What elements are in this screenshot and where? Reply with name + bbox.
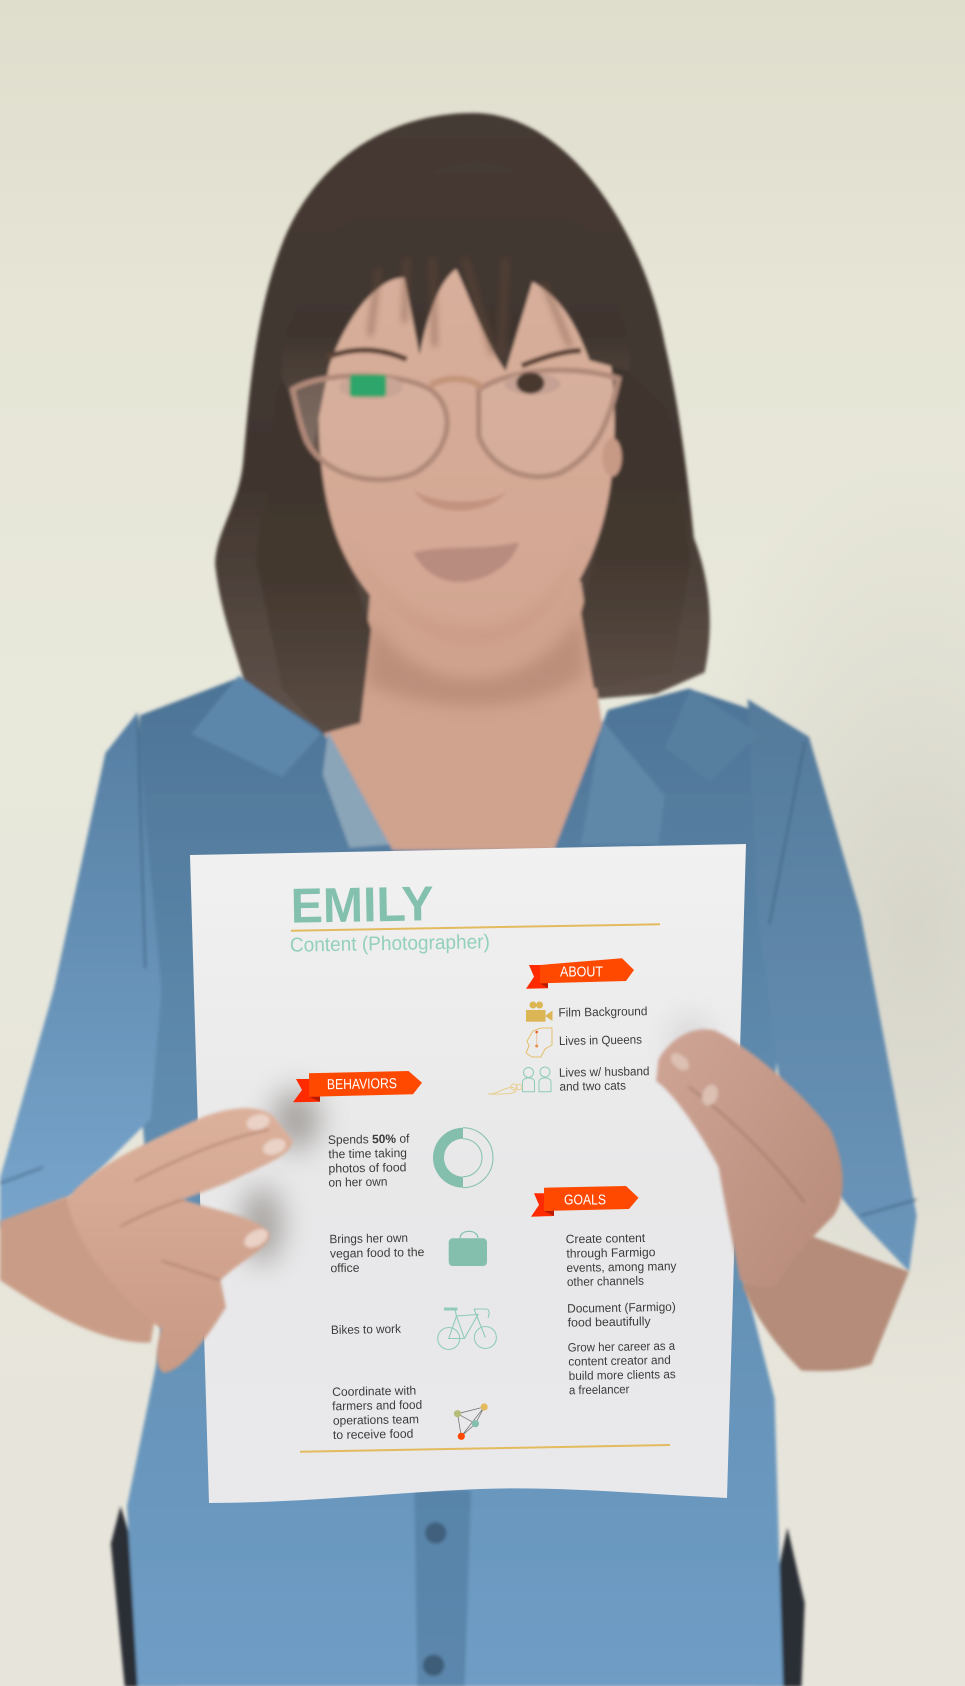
left hand [67, 1108, 293, 1373]
text: Bikes to work [331, 1322, 402, 1337]
text: on her own [328, 1175, 388, 1190]
goal 3: build more clients as [569, 1367, 676, 1383]
icon: Queens map [526, 1028, 552, 1057]
behavior: bikes [331, 1309, 496, 1350]
goal 1: events, among many [566, 1259, 677, 1275]
finger crease [689, 1087, 805, 1203]
donut chart: 50% [433, 1128, 493, 1188]
ribbon: about [526, 958, 634, 989]
trousers [111, 1506, 805, 1686]
text: to receive food [333, 1427, 414, 1442]
ribbon: goals [531, 1186, 638, 1217]
side hair locks behind jaw [256, 344, 691, 734]
text: operations team [333, 1412, 419, 1428]
nose shadow [414, 489, 508, 510]
ribbon: goals: GOALS [564, 1192, 606, 1208]
goal 3: Grow her career as a [568, 1339, 675, 1355]
hands and forearms [0, 1029, 909, 1373]
goal 3: content creator and [568, 1353, 671, 1369]
finger shadows on paper [242, 1016, 708, 1263]
icon: bicycle [438, 1309, 496, 1350]
right hand [656, 1029, 843, 1288]
goal 3 [568, 1339, 676, 1397]
collar left [191, 676, 321, 777]
left forearm [0, 1196, 161, 1343]
button strip [414, 1490, 471, 1686]
text [328, 1132, 410, 1190]
bottom rule [300, 1445, 670, 1452]
text: household: and two cats [559, 1079, 626, 1094]
ribbon: behaviors: BEHAVIORS [327, 1076, 397, 1093]
title rule [291, 924, 660, 931]
hair back [215, 113, 710, 737]
cheek shading [344, 527, 592, 645]
ear [602, 438, 622, 477]
sleeve seams [0, 719, 917, 1216]
glasses [293, 370, 619, 480]
neck [323, 581, 605, 850]
goal 1: through Farmigo [566, 1245, 656, 1261]
icon: cats [488, 1084, 522, 1094]
goals text [566, 1231, 677, 1397]
text: photos of food [328, 1160, 407, 1176]
goal 2: Document (Farmigo) [567, 1300, 676, 1316]
text: farmers and food [332, 1398, 422, 1413]
paper contents, slightly tilted [290, 877, 677, 1452]
behavior: 50% of time [328, 1128, 493, 1190]
icon: film camera [526, 1002, 552, 1022]
right sleeve [748, 699, 917, 1272]
text: Brings her own [329, 1231, 408, 1246]
ribbon: behaviors [293, 1071, 422, 1102]
icon: lunch bag [449, 1231, 487, 1266]
nails [668, 1050, 721, 1108]
finger creases [120, 1130, 269, 1280]
text: household: Lives w/ husband [559, 1064, 650, 1080]
shirt body [127, 678, 807, 1686]
inner placket [323, 721, 665, 848]
goal 1: other channels [567, 1274, 644, 1289]
text: vegan food to the [330, 1245, 425, 1261]
eyes and brows [327, 350, 581, 399]
left sleeve [0, 712, 161, 1229]
text [332, 1384, 422, 1442]
about list [488, 1002, 650, 1094]
face [319, 237, 614, 652]
paper sheet [190, 844, 746, 1503]
text: Spends 50% of [328, 1132, 410, 1147]
icon: two people [522, 1067, 551, 1092]
title: EMILY: EMILY [290, 877, 434, 934]
text [329, 1231, 425, 1275]
ribbon: about: ABOUT [560, 965, 603, 981]
fringe strands [370, 258, 570, 355]
goal 3: a freelancer [569, 1382, 630, 1397]
goal 1: Create content [566, 1231, 646, 1246]
lips [413, 542, 519, 582]
text: lives in Queens: Lives in Queens [559, 1033, 642, 1048]
subtitle: Content (Photographer) [290, 931, 490, 957]
nails [241, 1112, 288, 1251]
icon: network [454, 1403, 488, 1440]
text: office [330, 1261, 360, 1275]
text: household [559, 1064, 650, 1094]
goal 2: food beautifully [568, 1314, 652, 1330]
collar right [665, 689, 760, 781]
text: Coordinate with [332, 1384, 416, 1399]
neck shadow [366, 613, 586, 706]
text: film background: Film Background [558, 1004, 648, 1020]
text: the time taking [328, 1146, 407, 1161]
hair fringe [282, 161, 630, 452]
goal 2 [567, 1300, 676, 1330]
behavior: vegan food [329, 1231, 487, 1275]
behavior: coordinate [332, 1384, 488, 1442]
goal 1 [566, 1231, 677, 1289]
right forearm [742, 1226, 909, 1371]
